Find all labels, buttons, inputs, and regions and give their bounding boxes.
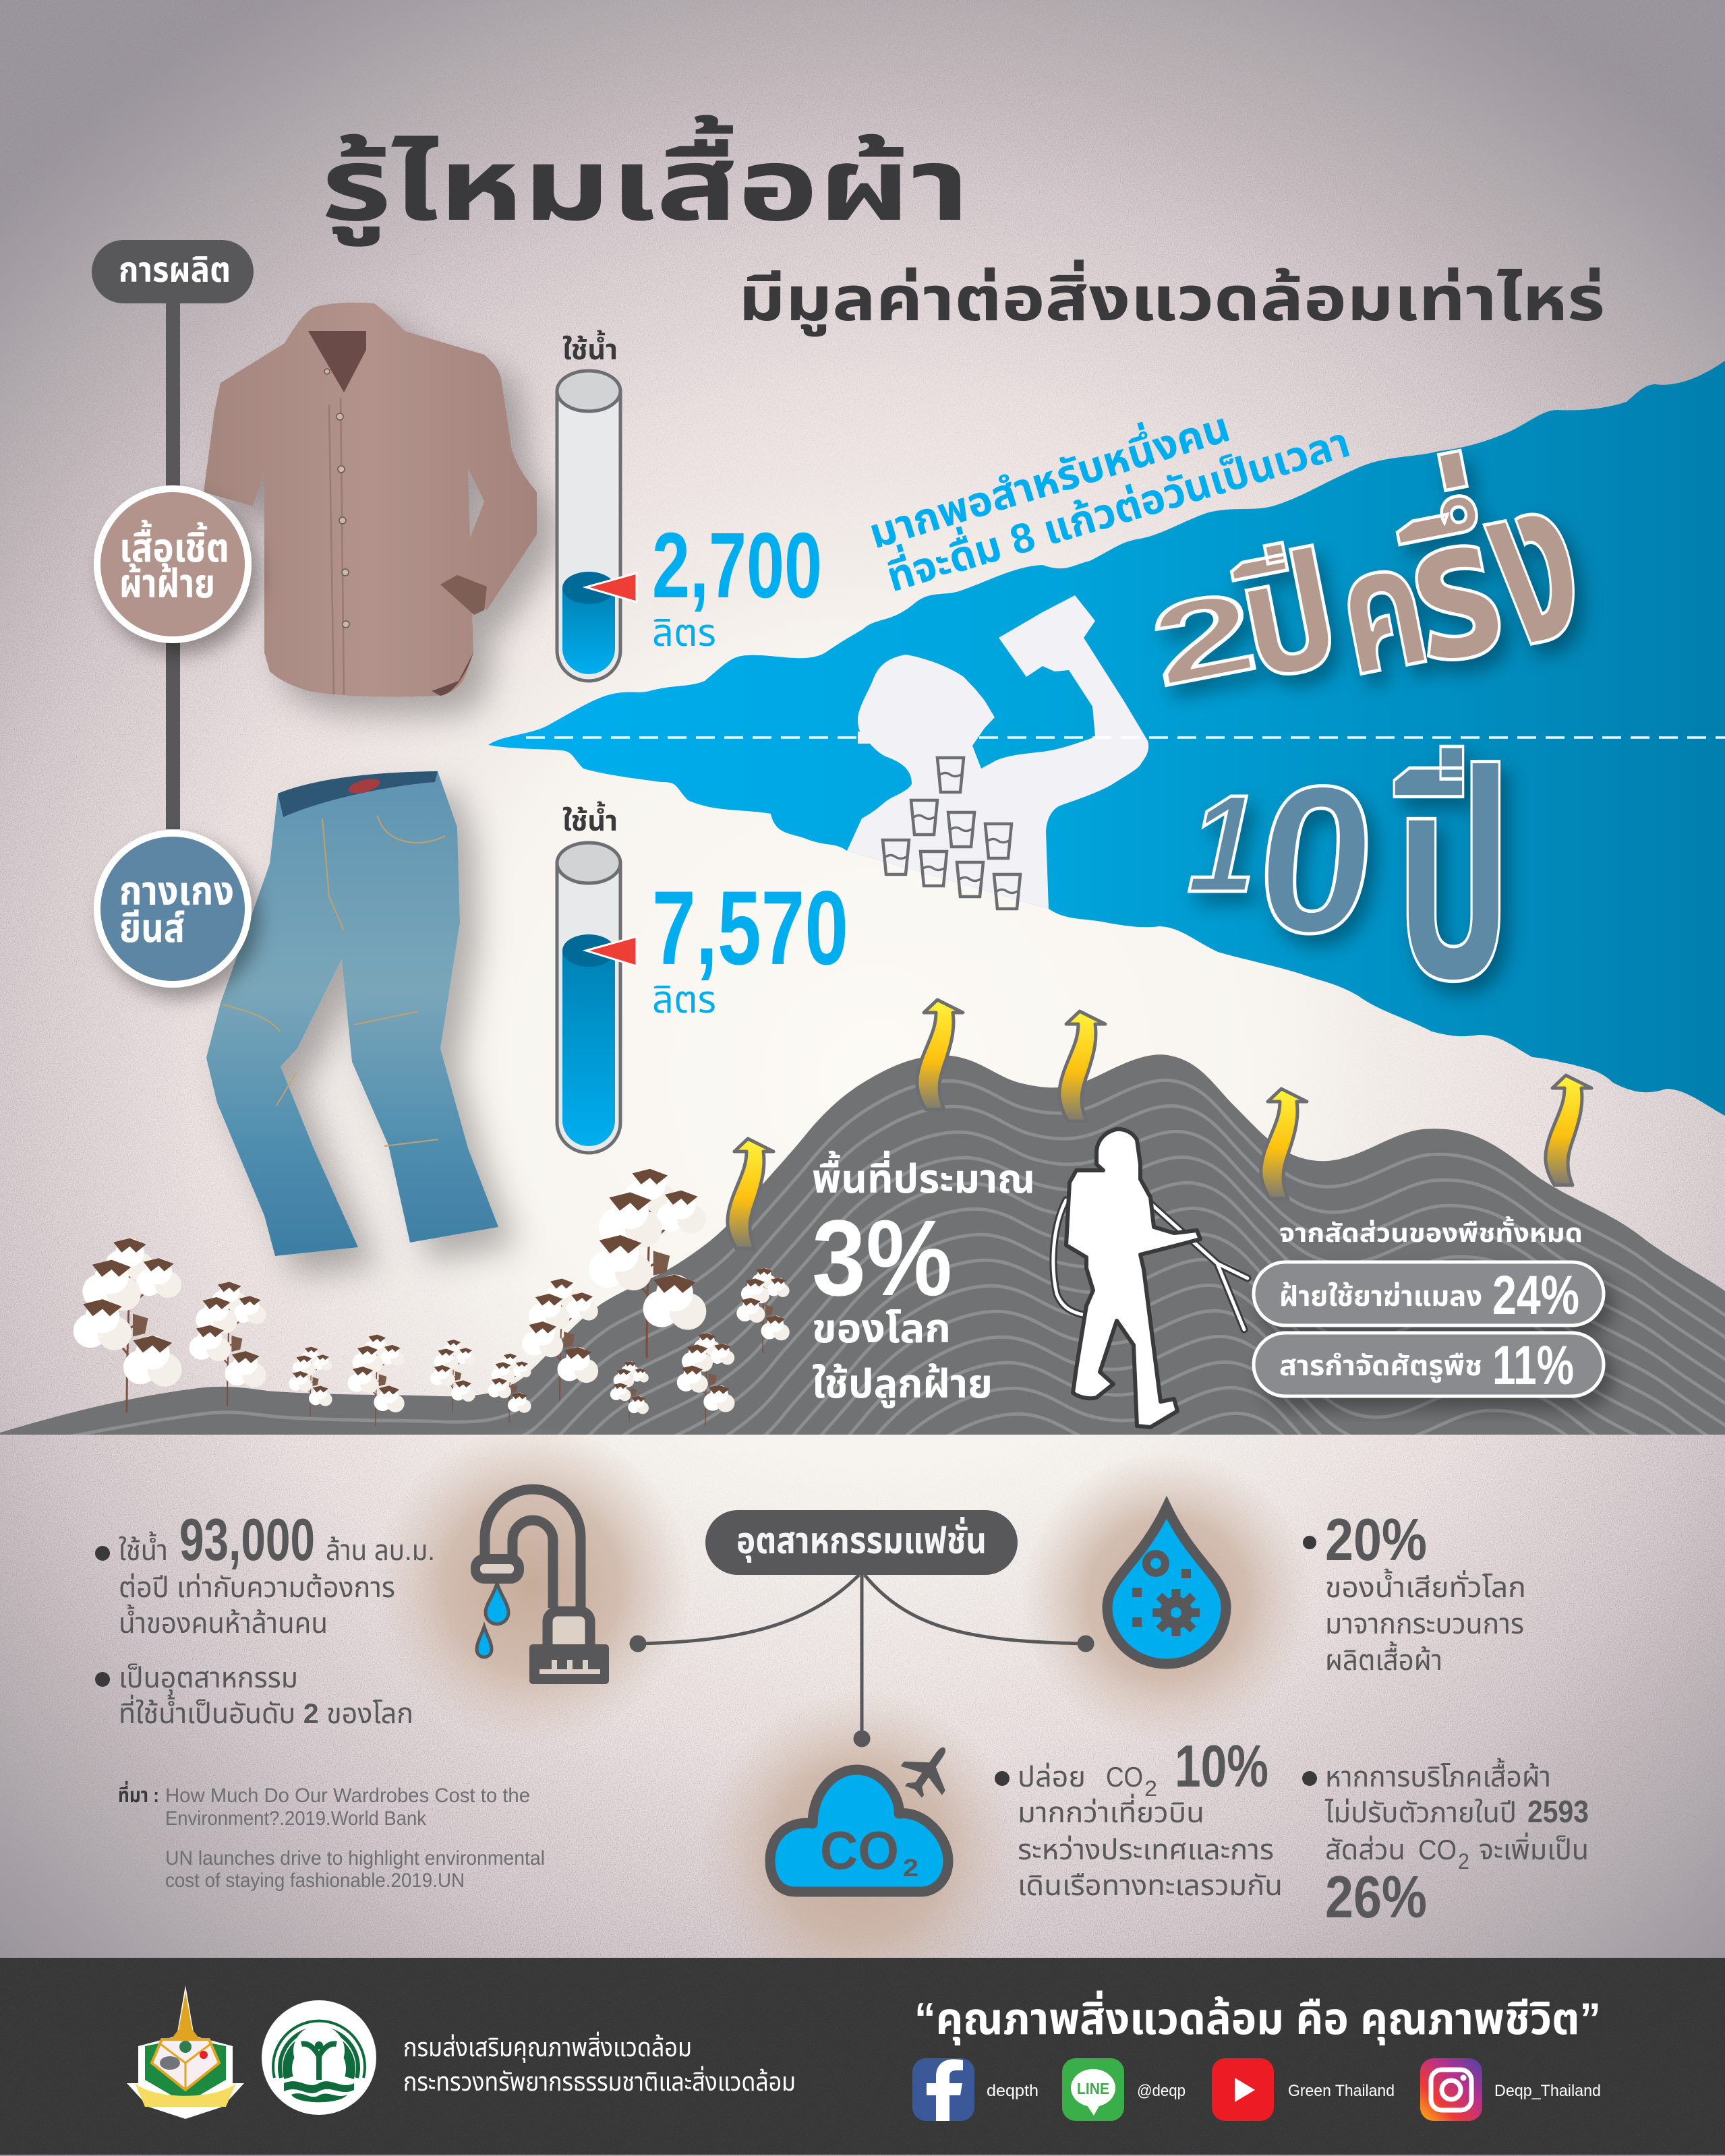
text block: CO2 26% by 2593: หากการบริโภคเสื้อผ้า bbox=[1325, 1758, 1551, 1793]
circle label: cotton shirt: ผ้าฝ้าย bbox=[119, 561, 215, 606]
circle label: jeans bbox=[97, 833, 248, 984]
text block: CO2 10% bbox=[995, 1733, 1283, 1901]
pointer bbox=[586, 936, 637, 966]
text block: CO2 10%: เดินเรือทางทะเลรวมกัน bbox=[1018, 1869, 1283, 1901]
text block: land share: พื้นที่ประมาณ bbox=[812, 1150, 1035, 1201]
text block: CO2 10%: 2 bbox=[1144, 1776, 1157, 1801]
text block: sources: How Much Do Our Wardrobes Cost to the bbox=[165, 1785, 530, 1807]
logo: environmental department bbox=[262, 2000, 376, 2115]
man drinking silhouette bbox=[847, 595, 1148, 909]
text: share of all crops: จากสัดส่วนของพืชทั้งหมด bbox=[1279, 1216, 1583, 1248]
text block: CO2 26% by 2593: 2593 bbox=[1527, 1794, 1589, 1829]
big label: two and a half years: ปี bbox=[1224, 518, 1352, 713]
big label: two and a half years: 2 bbox=[1142, 566, 1265, 710]
handle: facebook: deqpth bbox=[987, 2082, 1039, 2100]
text block: sources: ที่มา : bbox=[118, 1780, 159, 1807]
icon: youtube bbox=[1212, 2058, 1274, 2121]
big label: two and a half years: รึ่ bbox=[1382, 446, 1518, 706]
footer band bbox=[0, 1958, 1725, 2155]
unit: ลิตร bbox=[652, 978, 716, 1021]
circle label: cotton shirt bbox=[97, 489, 248, 640]
text block: water use bbox=[95, 1506, 435, 1729]
text block: water use: ล้าน ลบ.ม. bbox=[326, 1534, 435, 1566]
shirt bbox=[204, 303, 537, 697]
text block: sources: cost of staying fashionable.2019.UN bbox=[165, 1869, 465, 1892]
label: ใช้น้ำ bbox=[562, 801, 618, 837]
text block: land share: ของโลก bbox=[812, 1306, 951, 1351]
cotton plants bbox=[74, 1169, 790, 1426]
text block: water use: ที่ใช้น้ำเป็นอันดับ 2 ของโลก bbox=[119, 1694, 413, 1729]
fly and pocket seams bbox=[223, 816, 445, 1146]
handle: instagram: Deqp_Thailand bbox=[1494, 2082, 1601, 2100]
pill: insecticide 24%: 24% bbox=[1492, 1265, 1579, 1326]
icon: CO2 cloud bbox=[770, 1770, 948, 1892]
title: รู้ไหมเสื้อผ้า bbox=[321, 115, 970, 247]
pill: pesticide 11% bbox=[1254, 1333, 1604, 1396]
big label: ten years bbox=[1175, 716, 1513, 1040]
text block: CO2 26% by 2593: สัดส่วน bbox=[1325, 1834, 1405, 1865]
text block: CO2 26% by 2593: CO bbox=[1418, 1834, 1457, 1865]
waistband inside bbox=[278, 771, 438, 817]
timeline bar bbox=[166, 300, 180, 829]
tube: jeans water usage bbox=[557, 801, 848, 1153]
text block: water use: น้ำของคนห้าล้านคน bbox=[119, 1604, 328, 1639]
text block: wastewater 20%: 20% bbox=[1325, 1506, 1427, 1573]
yellow heat arrows bbox=[728, 1000, 1591, 1249]
dashed divider bbox=[526, 736, 1725, 739]
value: 7,570 bbox=[652, 870, 848, 987]
hose and wand bbox=[1053, 1197, 1248, 1329]
pill: insecticide 24% bbox=[1254, 1262, 1604, 1326]
text block: CO2 10%: CO bbox=[1106, 1761, 1143, 1793]
text block: sources: Environment?.2019.World Bank bbox=[165, 1807, 427, 1830]
text block: water use: ต่อปี เท่ากับความต้องการ bbox=[119, 1571, 395, 1603]
heading pill: production bbox=[92, 240, 254, 303]
text block: CO2 10%: ปล่อย bbox=[1018, 1761, 1086, 1793]
unit: ลิตร bbox=[652, 611, 716, 654]
placket bbox=[329, 398, 344, 694]
buttons bbox=[324, 369, 349, 628]
logo: ministry crest bbox=[127, 1985, 244, 2119]
handle: line: @deqp bbox=[1137, 2082, 1186, 2100]
text block: land share bbox=[812, 1150, 1035, 1408]
jeans bbox=[206, 771, 498, 1256]
text block: CO2 26% by 2593: 26% bbox=[1325, 1863, 1427, 1930]
pill: pesticide 11%: สารกำจัดศัตรูพืช bbox=[1279, 1350, 1482, 1383]
label: ใช้น้ำ bbox=[562, 330, 618, 365]
subtitle: มีมูลค่าต่อสิ่งแวดล้อมเท่าไหร่ bbox=[738, 259, 1605, 337]
big label: ten years: ปี bbox=[1394, 716, 1513, 1040]
icon: line bbox=[1062, 2058, 1124, 2121]
icon: airplane bbox=[893, 1733, 965, 1806]
text block: water use: 93,000 bbox=[179, 1506, 315, 1573]
handle: youtube: Green Thailand bbox=[1288, 2082, 1395, 2100]
icon glows bbox=[374, 1426, 1312, 2009]
rotated caption: enough for one person: ที่จะดื่ม 8 แก้วต่อวันเป็นเวลา bbox=[879, 413, 1355, 601]
text block: sources bbox=[118, 1780, 545, 1892]
circle label: jeans: กางเกง bbox=[119, 868, 234, 914]
big label: two and a half years: ง bbox=[1467, 429, 1600, 697]
big label: two and a half years bbox=[1142, 429, 1600, 713]
body bbox=[1066, 1129, 1200, 1427]
text block: CO2 26% by 2593: จะเพิ่มเป็น bbox=[1479, 1832, 1589, 1865]
red label bbox=[347, 776, 382, 796]
icon: line: LINE bbox=[1077, 2080, 1109, 2097]
department name bbox=[403, 2031, 796, 2097]
department name: กระทรวงทรัพยากรธรรมชาติและสิ่งแวดล้อม bbox=[403, 2066, 796, 2097]
text block: land share: ใช้ปลูกฝ้าย bbox=[812, 1361, 993, 1408]
pill: pesticide 11%: 11% bbox=[1492, 1335, 1574, 1396]
text block: CO2 26% by 2593: ไม่ปรับตัวภายในปี bbox=[1324, 1797, 1517, 1828]
big label: ten years: 1 bbox=[1175, 766, 1276, 921]
text block: CO2 26% by 2593: 2 bbox=[1458, 1849, 1469, 1874]
inner collar bbox=[308, 331, 366, 392]
icon: polluted water drop bbox=[1107, 1507, 1226, 1664]
circle label: cotton shirt: เสื้อเชิ้ต bbox=[119, 519, 229, 570]
heading pill bbox=[705, 1510, 1018, 1575]
eight glasses of water bbox=[883, 758, 1020, 909]
text block: wastewater 20%: ผลิตเสื้อผ้า bbox=[1325, 1641, 1442, 1676]
big label: two and a half years: ค bbox=[1322, 507, 1442, 712]
text block: sources: UN launches drive to highlight environmental bbox=[165, 1847, 545, 1869]
icon: facebook bbox=[912, 2058, 974, 2121]
text block: land share: 3% bbox=[812, 1197, 952, 1318]
icon: CO2 cloud: CO bbox=[820, 1820, 899, 1880]
icon: faucet bbox=[471, 1489, 609, 1684]
pill: insecticide 24%: ฝ้ายใช้ยาฆ่าแมลง bbox=[1279, 1280, 1482, 1312]
text block: CO2 10%: มากกว่าเที่ยวบิน bbox=[1018, 1793, 1204, 1828]
pointer bbox=[586, 573, 637, 602]
heading pill: production: การผลิต bbox=[119, 251, 231, 290]
text block: CO2 10%: 10% bbox=[1175, 1733, 1268, 1799]
title bbox=[321, 115, 1605, 337]
heading pill: อุตสาหกรรมแฟชั่น bbox=[736, 1517, 987, 1563]
text block: water use: ใช้น้ำ bbox=[119, 1531, 168, 1566]
panel: fashion industry bbox=[95, 1426, 1589, 2009]
icon: instagram bbox=[1420, 2058, 1482, 2121]
rotated caption: enough for one person: มากพอสำหรับหนึ่งคน bbox=[862, 398, 1235, 558]
text block: water use: เป็นอุตสาหกรรม bbox=[119, 1662, 298, 1695]
text block: CO2 10%: ระหว่างประเทศและการ bbox=[1018, 1834, 1274, 1865]
slogan: “คุณภาพสิ่งแวดล้อม คือ คุณภาพชีวิต” bbox=[914, 1990, 1601, 2045]
circle label: jeans: ยีนส์ bbox=[119, 905, 185, 951]
text block: wastewater 20%: ของน้ำเสียทั่วโลก bbox=[1325, 1568, 1526, 1603]
blue water wedge bbox=[488, 361, 1725, 1116]
icon: CO2 cloud: 2 bbox=[903, 1854, 918, 1882]
text block: wastewater 20% bbox=[1303, 1506, 1526, 1676]
sprayer man silhouette bbox=[1053, 1129, 1248, 1427]
mountain of cotton fields bbox=[0, 855, 1725, 1435]
big label: ten years: 0 bbox=[1249, 743, 1384, 976]
text block: wastewater 20%: มาจากกระบวนการ bbox=[1325, 1608, 1524, 1640]
cuff bbox=[440, 575, 487, 615]
value: 2,700 bbox=[652, 514, 822, 618]
panel: production timeline bbox=[92, 240, 254, 829]
shirt hem shadow bbox=[432, 653, 473, 696]
tube: shirt water usage bbox=[557, 330, 822, 681]
department name: กรมส่งเสริมคุณภาพสิ่งแวดล้อม bbox=[403, 2031, 692, 2063]
connector lines bbox=[631, 1575, 1092, 1745]
text block: CO2 26% by 2593 bbox=[1302, 1758, 1589, 1930]
